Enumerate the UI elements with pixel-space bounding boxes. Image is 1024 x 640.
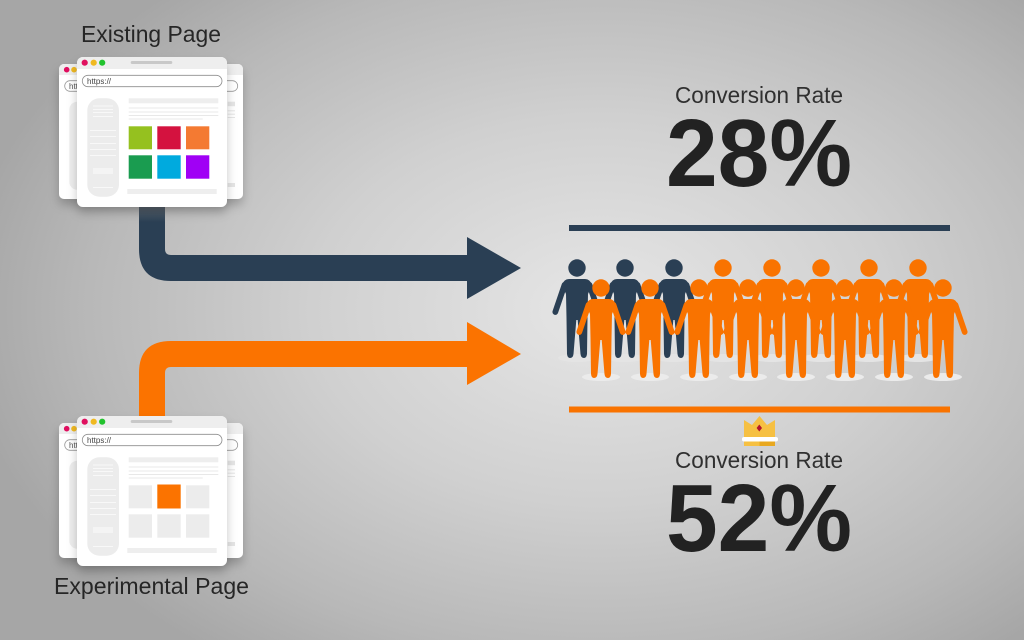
browser: experimental page: htt — [69, 441, 79, 450]
browser: experimental page — [59, 416, 243, 566]
label: experimental page: Experimental Page — [54, 573, 249, 599]
browser: existing page — [59, 57, 243, 207]
stat: 52 percent: 52% — [666, 465, 852, 572]
divider: orange bar — [569, 406, 950, 412]
front row shadows — [582, 373, 962, 381]
divider: navy bar — [569, 225, 950, 231]
front row people — [579, 279, 965, 378]
browser: existing page: htt — [69, 82, 79, 91]
browser: experimental page: https:// — [87, 436, 112, 445]
conversion rate heading: existing: Conversion Rate — [675, 82, 843, 108]
back row shadows — [558, 354, 937, 362]
arrow: existing page to audience — [139, 207, 521, 299]
crowd of people — [555, 259, 965, 381]
back row people — [555, 259, 940, 358]
icon: crown — [742, 416, 778, 446]
label: existing page: Existing Page — [81, 21, 221, 47]
browser: existing page: https:// — [87, 77, 112, 86]
stat: 28 percent: 28% — [666, 100, 852, 207]
conversion rate heading: experimental: Conversion Rate — [675, 447, 843, 473]
arrow: experimental page to audience — [139, 322, 521, 416]
